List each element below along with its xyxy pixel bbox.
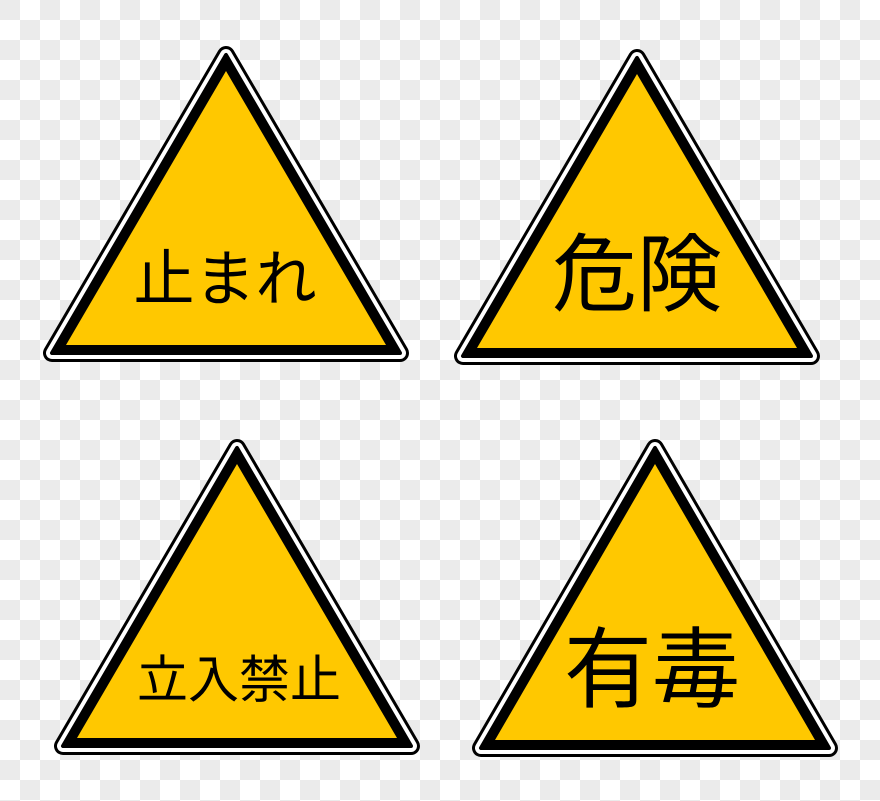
label: 立入禁止: 立入禁止 (137, 652, 341, 708)
sign: 有毒 (481, 448, 829, 748)
sign: 立入禁止 (63, 448, 411, 746)
label: 有毒: 有毒 (564, 620, 740, 720)
sign: 危険 (463, 58, 811, 356)
label: 止まれ: 止まれ (133, 245, 317, 313)
sign: 止まれ (52, 55, 400, 353)
label: 危険: 危険 (552, 228, 722, 324)
